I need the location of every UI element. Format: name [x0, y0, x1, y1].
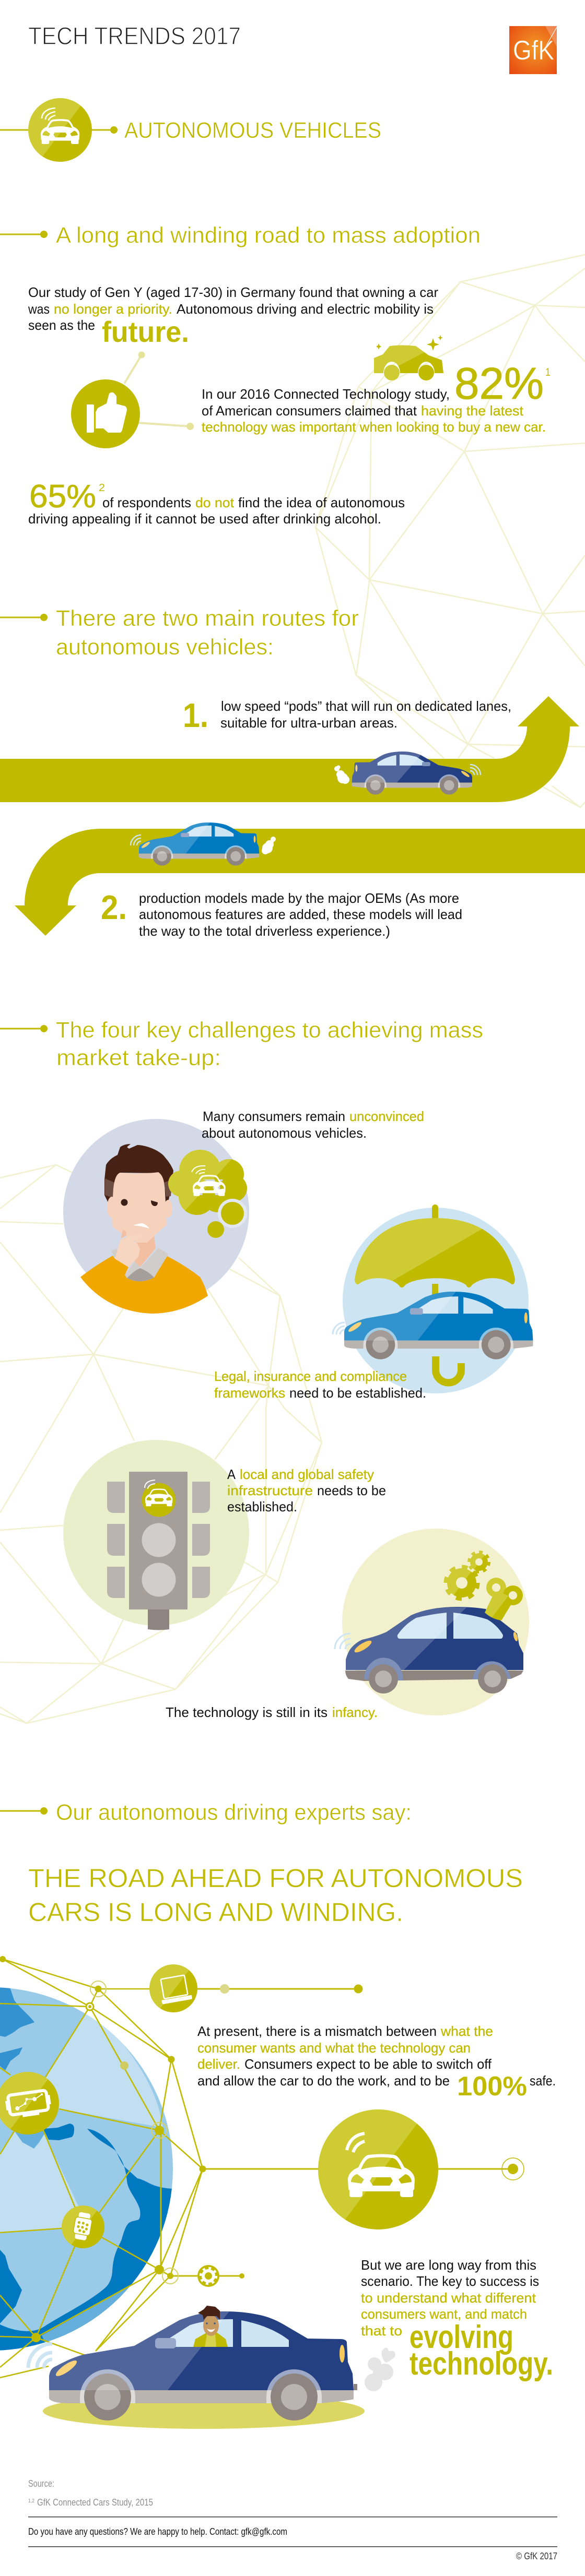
challenge 3 text: established. [227, 1499, 297, 1514]
text: connected technology study [202, 386, 546, 435]
route 2: arrow road [15, 829, 585, 936]
icon: thumbs up with connectors [71, 352, 194, 448]
neck [132, 1236, 156, 1267]
side flaps [107, 1482, 210, 1598]
post [148, 1609, 169, 1630]
challenge 2 text: need to be established. [289, 1385, 426, 1401]
text: mismatch: deliver. [197, 2056, 240, 2072]
wifi [335, 1633, 350, 1649]
sweater [80, 1256, 208, 1314]
heading: four key challenges [0, 1018, 483, 1070]
route 1: text: suitable for ultra-urban areas. [220, 715, 397, 731]
icon: laptop circle [149, 1964, 197, 2012]
text: connected technology study: technology was important when looking to buy a new car. [202, 419, 546, 435]
text: long way: scenario. The key to success is [361, 2273, 539, 2289]
challenge 1: thinking consumer [63, 1119, 249, 1314]
text: mismatch: At present, there is a mismatch between [197, 2023, 437, 2039]
driver [193, 2306, 228, 2347]
text: connected technology study: of American consumers claimed that [202, 403, 417, 419]
sill [345, 1671, 523, 1681]
heading: experts say: Our autonomous driving experts say: [56, 1800, 412, 1825]
lamps [142, 1483, 176, 1597]
route 2: light blue car [131, 822, 276, 866]
challenge 3 text: A [227, 1466, 236, 1482]
challenge 3 text: infrastructure [227, 1483, 313, 1498]
eyes [121, 1199, 158, 1206]
headline: the road ahead: CARS IS LONG AND WINDING. [28, 1898, 403, 1927]
gear large [446, 1567, 477, 1599]
icon: watch circle [62, 2205, 104, 2248]
challenge 3: traffic light [63, 1440, 249, 1630]
ring at gear [162, 2268, 178, 2284]
route 1: text [183, 696, 511, 734]
text: long way: evolving [410, 2319, 513, 2355]
challenge 2 text: Legal, insurance and compliance [214, 1368, 407, 1384]
challenge 4 text: The technology is still in its [166, 1704, 327, 1720]
gear small [469, 1552, 489, 1572]
headline: the road ahead [28, 1864, 523, 1927]
face [112, 1172, 167, 1243]
source [28, 2478, 153, 2508]
route 1: text: 1. [183, 696, 208, 734]
logo: GfK [509, 26, 557, 74]
background network: upper [315, 255, 585, 807]
car highlight [346, 1607, 466, 1670]
text: gen y study: Autonomous driving and electric mobility is [177, 301, 434, 317]
route 2: text: 2. [101, 888, 127, 926]
text: gen y study: future. [102, 315, 189, 348]
text: mismatch: safe. [530, 2073, 556, 2089]
hand [115, 1234, 143, 1267]
route 1: text: low speed “pods” that will run on dedicated lanes, [221, 698, 511, 714]
text: drinking alcohol [28, 495, 405, 527]
heading: two main routes: autonomous vehicles: [56, 635, 274, 660]
thought bubble [168, 1150, 247, 1215]
network lines [0, 1959, 203, 2378]
section icon: autonomous vehicles [0, 98, 118, 162]
thought bubble circles [207, 1199, 247, 1238]
text: long way: consumers want, and match [361, 2306, 527, 2322]
housing [129, 1472, 188, 1609]
heading: two main routes [0, 606, 359, 660]
challenge 2: umbrella and car [333, 1204, 533, 1393]
icon: connected car in bubble [192, 1166, 226, 1196]
stat: 65%: 65% [29, 479, 96, 515]
route 1: dark blue car [334, 752, 481, 795]
windows [397, 1613, 503, 1639]
light dot [120, 2061, 128, 2070]
source: 1,2 [28, 2498, 34, 2504]
heading: autonomous vehicles: AUTONOMOUS VEHICLES [124, 118, 381, 143]
headline: the road ahead: THE ROAD AHEAD FOR AUTONOMOUS [28, 1864, 523, 1893]
challenge 1 text: unconvinced [349, 1108, 424, 1124]
text: drinking alcohol: find the idea of autonomous [238, 495, 405, 510]
challenge 3 text [227, 1466, 386, 1514]
challenge 1 text: Many consumers remain [203, 1108, 345, 1124]
wind-up key [485, 1578, 523, 1620]
logo: GfK: GfK [513, 35, 554, 66]
text: mismatch: 100% [457, 2071, 527, 2102]
text: mismatch [197, 2023, 556, 2102]
challenge 2 text [214, 1368, 426, 1401]
text: mismatch: and allow the car to do the work, and to be [197, 2073, 450, 2089]
wifi [333, 1322, 345, 1334]
stat: 82%: 82% [454, 359, 544, 409]
lamps [353, 1631, 519, 1654]
end dot [354, 1984, 362, 1994]
background network: middle [0, 1165, 322, 1723]
globe network illustration [0, 1956, 524, 2378]
text: connected technology study: In our 2016 Connected Technology study, [202, 386, 450, 402]
finger [121, 1230, 126, 1238]
route 1: arrow road [0, 696, 579, 802]
challenge 3 text: local and global safety [240, 1466, 374, 1482]
node: ring [86, 2003, 93, 2010]
shirt [127, 1268, 154, 1281]
text: long way [361, 2257, 553, 2382]
icon: gear circle [197, 2265, 219, 2287]
text: mismatch: Consumers expect to be able to switch off [244, 2056, 492, 2072]
copyright: © GfK 2017 [516, 2551, 557, 2561]
text: gen y study [28, 284, 438, 348]
heading: long and winding road: A long and winding road to mass adoption [56, 223, 481, 248]
wheels [364, 1657, 511, 1694]
route 2: text [101, 888, 462, 939]
car [344, 1292, 533, 1359]
ears [107, 1197, 172, 1218]
text: drinking alcohol: of respondents [102, 495, 191, 510]
car body [346, 1607, 523, 1670]
mouth [133, 1223, 149, 1229]
thick link [161, 1989, 513, 2276]
text: long way: But we are long way from this [361, 2257, 536, 2273]
heading: four key challenges: The four key challenges to achieving mass [56, 1018, 483, 1043]
challenge 1 text: about autonomous vehicles. [202, 1125, 367, 1141]
text: gen y study: was [28, 301, 50, 317]
text: mismatch: consumer wants and what the technology can [197, 2040, 471, 2056]
stat: 82%: 1 [545, 366, 551, 378]
title: TECH TRENDS 2017 [28, 22, 241, 50]
collar back [111, 1248, 121, 1259]
globe [0, 1983, 178, 2359]
contact: Do you have any questions? We are happy to help. Contact: gfk@gfk.com [28, 2526, 287, 2537]
text: gen y study: no longer a priority. [54, 301, 172, 317]
route 2: text: production models made by the major OEMs (As more [139, 890, 459, 906]
small nodes [0, 1956, 206, 2342]
wifi [28, 2344, 52, 2368]
text: drinking alcohol: driving appealing if it cannot be used after drinking alcohol. [28, 511, 381, 527]
text: gen y study: Our study of Gen Y (aged 17-30) in Germany found that owning a car [28, 284, 438, 300]
end dot small [239, 2273, 244, 2279]
source: Source: [28, 2478, 54, 2489]
text: long way: that to [361, 2323, 402, 2339]
heading: four key challenges: market take-up: [56, 1045, 221, 1070]
stat: 65%: 2 [99, 482, 105, 494]
text: long way: to understand what different [361, 2290, 536, 2306]
text: drinking alcohol: do not [195, 495, 235, 510]
text: mismatch: what the [440, 2023, 493, 2039]
icon: connected car on lamp [145, 1480, 172, 1506]
node: ring lower [151, 2122, 167, 2138]
text: long way: technology. [410, 2346, 553, 2382]
challenge 4 text: infancy. [332, 1704, 378, 1720]
end node with ring [502, 2158, 524, 2180]
umbrella [355, 1204, 515, 1299]
text: gen y study: seen as the [28, 317, 95, 333]
challenge 2 text: frameworks [214, 1385, 285, 1401]
challenge 1 text [202, 1108, 424, 1141]
challenge 3 text: needs to be [317, 1483, 386, 1498]
challenge 4: wind-up car [335, 1529, 529, 1715]
hair highlight [105, 1178, 172, 1198]
text: connected technology study: having the latest [421, 403, 524, 419]
source: GfK Connected Cars Study, 2015 [37, 2497, 153, 2508]
node: top [90, 1981, 106, 1997]
icon: VR circle [0, 2072, 59, 2134]
heading: two main routes: There are two main routes for [56, 606, 359, 631]
exhaust smoke [365, 2347, 395, 2391]
ground shadow [43, 2393, 365, 2429]
icon: connected car large circle [318, 2109, 438, 2229]
driver car [28, 2306, 395, 2429]
route 2: text: autonomous features are added, these models will lead [139, 907, 462, 922]
route 2: text: the way to the total driverless experience.) [139, 923, 390, 939]
umbrella handle [436, 1356, 461, 1383]
light dot on line [220, 1984, 229, 1994]
collar [125, 1248, 168, 1279]
car [49, 2311, 354, 2420]
icon: shiny new car [374, 335, 443, 380]
hair [104, 1144, 173, 1212]
exhaust [354, 2384, 357, 2390]
